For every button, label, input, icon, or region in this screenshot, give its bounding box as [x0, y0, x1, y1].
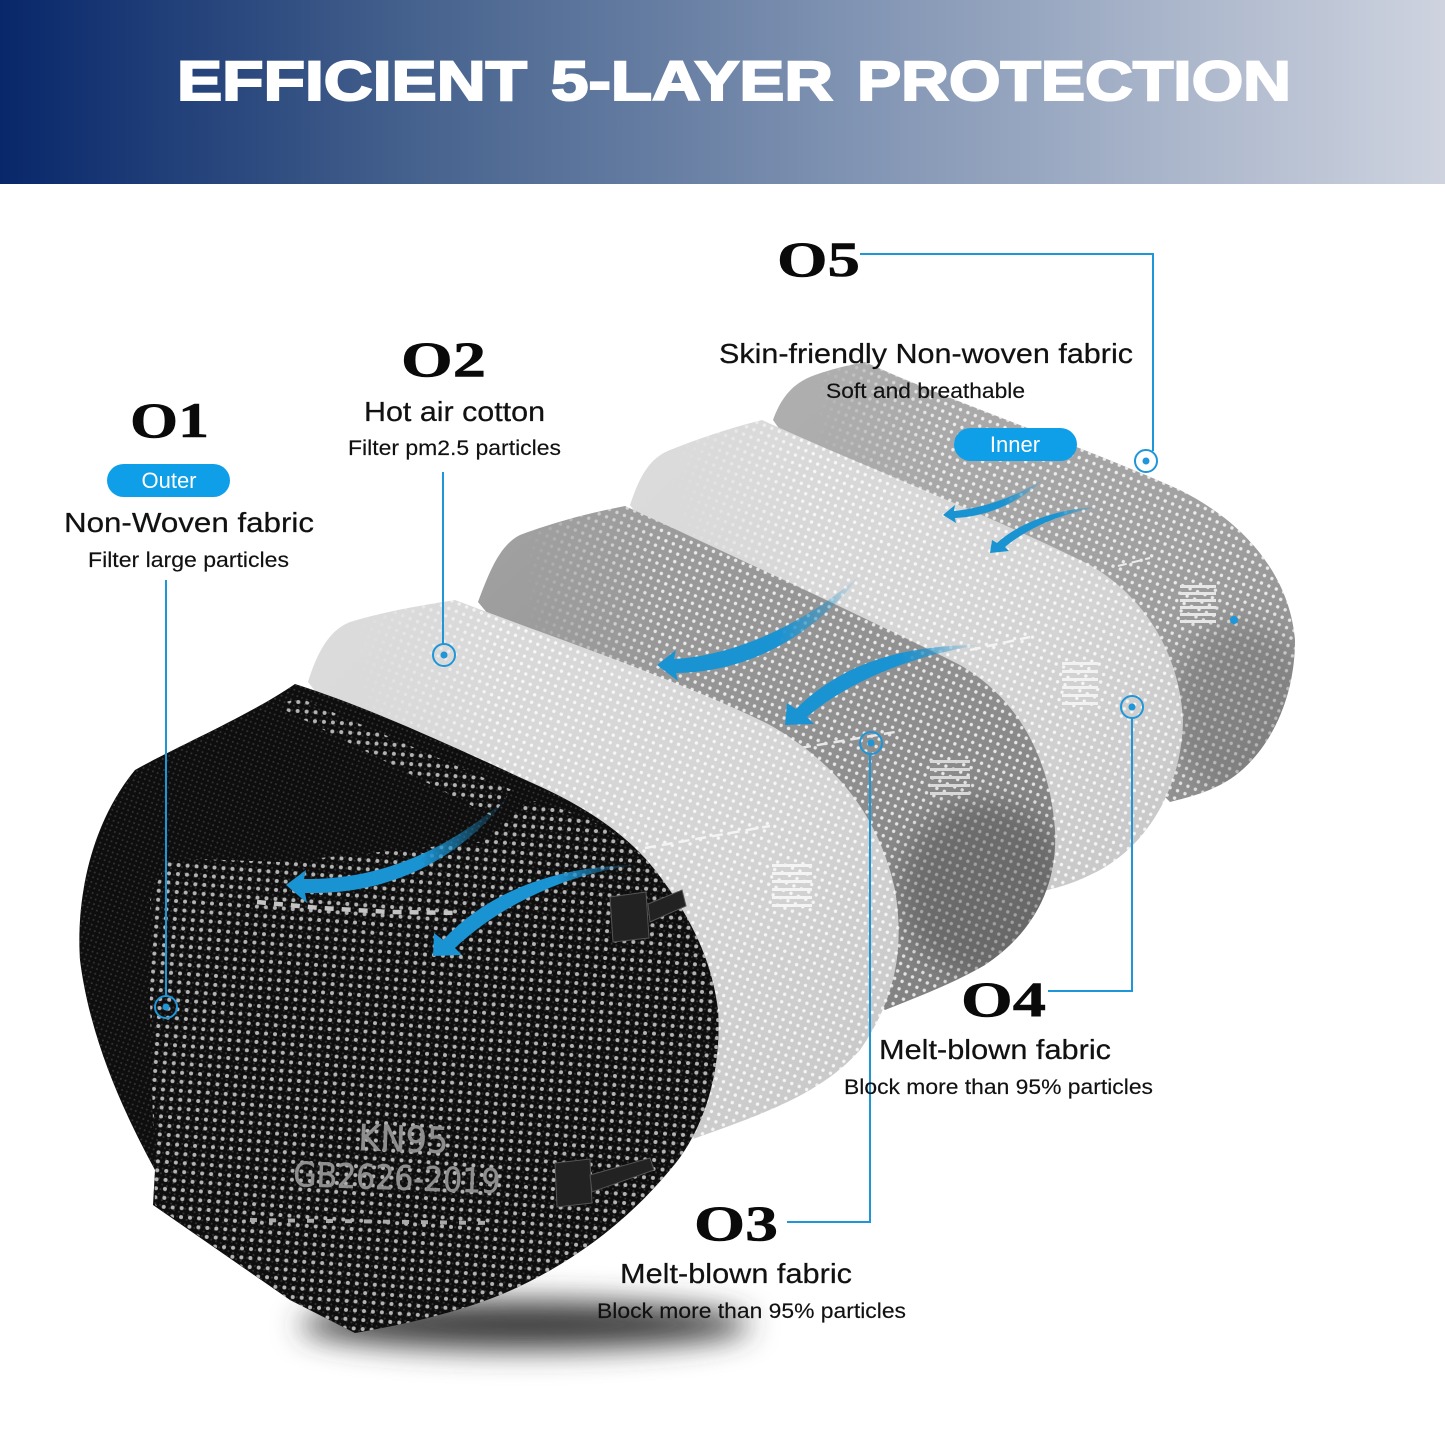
KN95 marking: KN95 — [358, 1118, 449, 1162]
ear loop tabs — [555, 890, 686, 1207]
marker dot on layer 5 — [1230, 616, 1238, 624]
label 04: melt-blown fabric: Block more than 95% particles — [844, 1076, 1153, 1099]
label 05: skin-friendly non-woven fabric — [719, 231, 1133, 461]
label 04: melt-blown fabric — [844, 971, 1153, 1099]
label 01: outer non-woven fabric: Filter large particles — [88, 549, 289, 572]
stitching — [257, 902, 458, 913]
title: EFFICIENT — [177, 49, 527, 112]
label 05: skin-friendly non-woven fabric: Skin-friendly Non-woven fabric — [719, 338, 1133, 369]
label 01: outer non-woven fabric: O1 — [130, 392, 209, 448]
leader line 05 — [860, 254, 1157, 472]
mask layer 3: melt-blown fabric — [478, 505, 1070, 1015]
leader line 01 — [155, 580, 177, 1018]
dotted fabric body — [140, 680, 730, 1340]
pill: outer — [107, 464, 230, 497]
label 01: outer non-woven fabric: Non-Woven fabric — [64, 507, 314, 538]
label 02: hot air cotton: O2 — [401, 331, 486, 387]
title: 5-LAYER — [551, 49, 833, 112]
leader line 03 — [787, 732, 882, 1222]
mask layer 1: black outer KN95 mask — [79, 680, 730, 1340]
KN95 marking: GB2626-2019 — [293, 1155, 501, 1202]
mask layer 5: inner skin-friendly fabric — [773, 360, 1310, 805]
airflow arrows — [286, 478, 1100, 956]
label 02: hot air cotton: Filter pm2.5 particles — [348, 437, 561, 460]
KN95 marking — [293, 1118, 501, 1202]
leader line 02 — [433, 472, 455, 666]
label 05: skin-friendly non-woven fabric: O5 — [777, 231, 860, 287]
label 01: outer non-woven fabric — [64, 392, 314, 572]
label 03: melt-blown fabric — [597, 1195, 906, 1323]
mask layer 2: hot air cotton — [308, 600, 903, 1140]
label 04: melt-blown fabric: O4 — [961, 971, 1046, 1027]
label 03: melt-blown fabric: O3 — [694, 1195, 778, 1251]
label 03: melt-blown fabric: Melt-blown fabric — [620, 1258, 852, 1289]
pill: inner: Inner — [990, 432, 1040, 457]
title: PROTECTION — [857, 49, 1291, 112]
header banner — [0, 0, 1445, 184]
mask layer 4: melt-blown fabric — [630, 420, 1185, 895]
ground shadow — [300, 1301, 750, 1349]
leader line 04 — [1048, 696, 1143, 991]
label 02: hot air cotton: Hot air cotton — [364, 396, 545, 427]
label 05: skin-friendly non-woven fabric: Soft and breathable — [826, 380, 1025, 403]
pill: inner — [954, 428, 1077, 461]
label 03: melt-blown fabric: Block more than 95% particles — [597, 1300, 906, 1323]
label 04: melt-blown fabric: Melt-blown fabric — [879, 1034, 1111, 1065]
pill: outer: Outer — [141, 468, 197, 493]
label 02: hot air cotton — [348, 331, 561, 460]
